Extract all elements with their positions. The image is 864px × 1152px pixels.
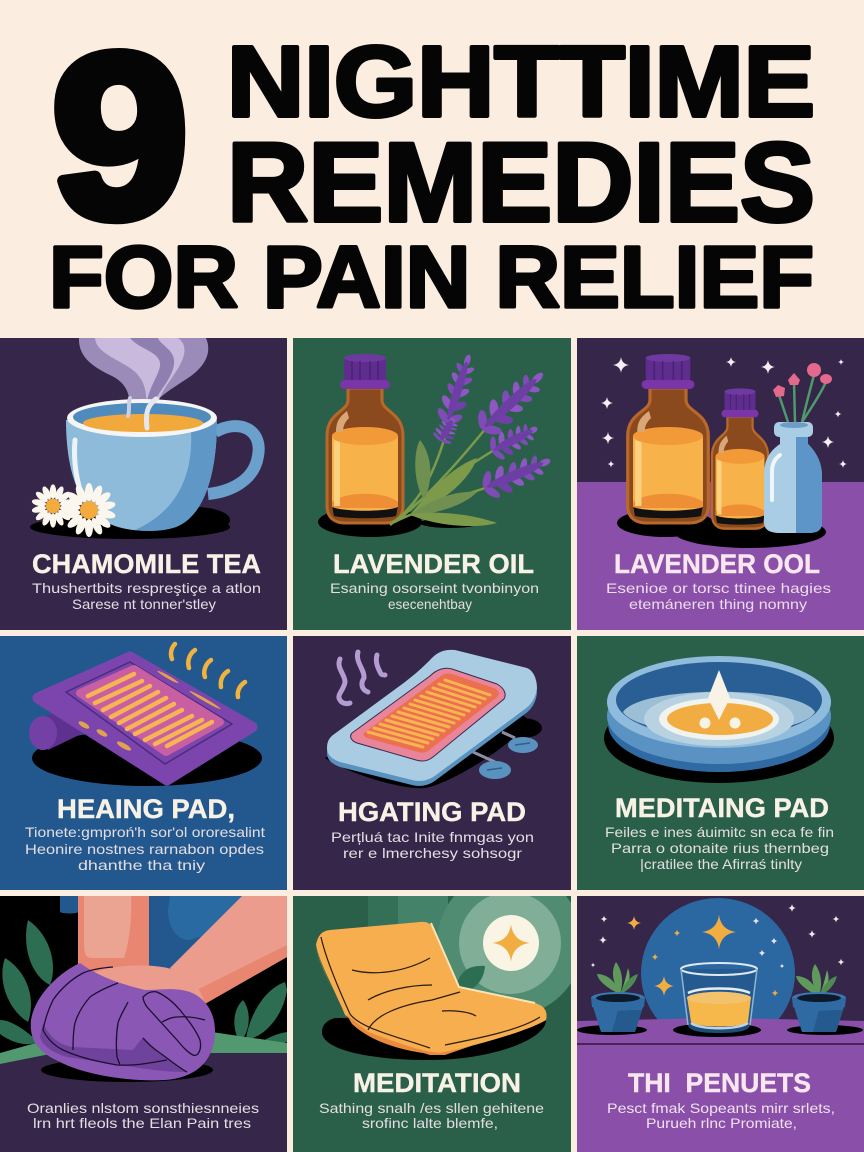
description: Esaning osorseint tvonbinyon <box>330 580 539 596</box>
shadow <box>604 693 834 783</box>
description: Perțluá tac Inite fnmgas yon <box>331 829 534 845</box>
heading: LAVENDER OOL <box>614 549 820 579</box>
icon: arm right <box>170 896 287 1005</box>
description <box>606 580 831 612</box>
icon: lavender sprigs <box>390 350 557 526</box>
title line: remedies: REMEDIES <box>227 120 815 245</box>
description: Heonire nostnes rarnabon opdes <box>25 841 264 857</box>
icon: daisies <box>31 483 116 537</box>
icon: plugs <box>473 732 538 779</box>
panel: meditation cushion <box>293 896 571 1152</box>
description: Tionete:gmproń'h sor'ol ororesalint <box>25 824 265 840</box>
panel: lavender oil <box>293 338 571 630</box>
icon: leaf <box>458 966 485 988</box>
description: Esenioe or torsc ttinee hagies <box>606 580 831 596</box>
shadow <box>32 730 262 786</box>
icon: purple wrap <box>31 963 215 1082</box>
description <box>28 1103 258 1128</box>
night circle <box>641 898 795 1048</box>
description: Sarese nt tonner'stley <box>72 596 216 612</box>
description: lrn hrt fleols the Elan Pain tres <box>33 1115 251 1131</box>
description: dhanthe tha tniy <box>78 857 205 873</box>
icon: bottle <box>327 354 403 523</box>
heading: LAVENDER OIL <box>333 549 534 579</box>
icon: dish <box>607 656 831 772</box>
panel: pain relief wrap <box>0 896 287 1152</box>
heading: HEAING PAD, <box>57 794 235 824</box>
heading: HGATING PAD <box>338 797 526 827</box>
icon: purple heating pad <box>38 657 252 780</box>
icon: heat marks <box>171 644 245 697</box>
description: Pesct fmak Sopeants mirr srlets, <box>607 1100 835 1116</box>
table <box>577 1018 864 1152</box>
heading: CHAMOMILE TEA <box>32 549 261 579</box>
description <box>605 824 834 872</box>
heading: THI PENUETS <box>628 1068 811 1098</box>
shadow <box>322 1018 546 1060</box>
icon: leaves <box>0 920 287 1045</box>
description: srofinc lalte blemfe, <box>362 1115 498 1131</box>
shadow <box>318 507 422 537</box>
shadow <box>325 712 530 788</box>
stars <box>590 904 844 996</box>
panel: night glass <box>577 896 864 1152</box>
icon: hand <box>95 966 204 1001</box>
backdrop circles <box>368 896 571 1008</box>
title <box>49 7 815 326</box>
green band <box>0 1031 287 1064</box>
description: Parra o otonaite rius thernbeg <box>611 840 829 856</box>
description: Oranlies nlstom sonsthiesnneies <box>27 1100 259 1116</box>
description: esecenehtbay <box>388 596 472 612</box>
icon: large bottle <box>628 354 708 523</box>
icon: steam <box>78 338 208 400</box>
icon: glass of juice <box>673 963 761 1037</box>
panel: heating pad blue <box>0 636 287 890</box>
description: |cratilee the Afirraś tinlty <box>640 856 802 872</box>
floor <box>0 1053 287 1152</box>
description <box>32 580 261 612</box>
icon: arm left <box>78 896 149 976</box>
description <box>25 824 265 873</box>
heading: MEDITAING PAD <box>615 793 829 823</box>
panel: heating pad purple <box>293 636 571 890</box>
description <box>320 1103 544 1130</box>
title line: nighttime: NIGHTTIME <box>227 26 815 138</box>
shadow <box>30 515 230 539</box>
table surface <box>577 482 864 630</box>
panel: essential oil bottles <box>577 338 864 630</box>
icon: right pot <box>787 964 863 1035</box>
icon: small bottle <box>712 388 768 529</box>
description: rer e lmerchesy sohsogr <box>343 845 522 861</box>
description <box>330 580 539 612</box>
icon: steam squiggles <box>339 652 385 704</box>
heading: MEDITATION <box>353 1068 521 1098</box>
icon: flowers <box>773 363 832 422</box>
description: etemáneren thing nomny <box>629 596 807 612</box>
description <box>331 829 534 861</box>
description <box>607 1100 835 1131</box>
title line: for pain relief: FOR PAIN RELIEF <box>49 229 814 326</box>
icon: roller <box>29 700 100 750</box>
icon: glass vase <box>764 422 822 533</box>
panel: chamomile tea <box>0 338 287 630</box>
stars <box>601 357 847 468</box>
icon: left pot <box>577 962 647 1035</box>
icon: light blue heating pad <box>327 650 537 786</box>
icon: teacup <box>66 398 259 531</box>
big number 9: 9 <box>52 7 188 266</box>
description: Feiles e ines áuimitc sn eca fe fin <box>605 824 834 840</box>
shadow <box>617 509 826 548</box>
icon: cushion <box>316 922 547 1055</box>
description: Sathing snalh /es sllen gehitene <box>319 1100 544 1116</box>
blue backdrop <box>60 896 242 970</box>
icon: moon and star <box>483 915 539 971</box>
description: Purueh rlnc Promiate, <box>646 1115 797 1131</box>
description: Thushertbits respreştiçe a atlon <box>32 580 261 596</box>
panel: meditating dish <box>577 636 864 890</box>
